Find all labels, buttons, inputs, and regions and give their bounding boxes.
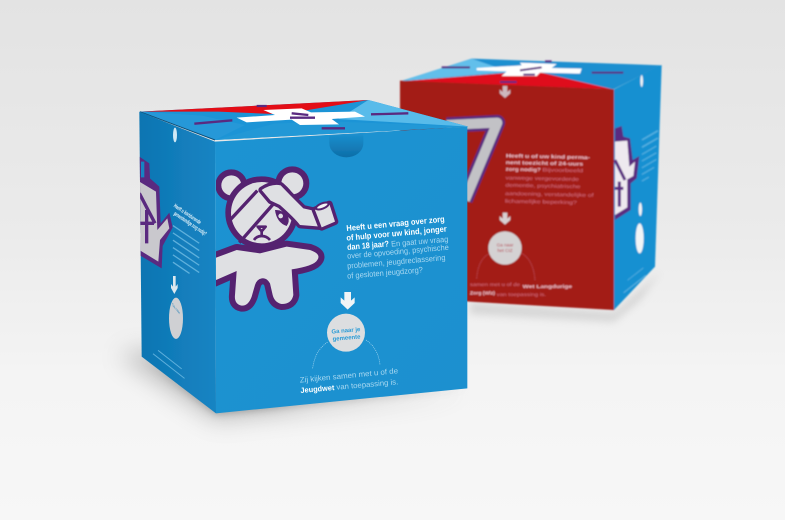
back box [400,59,662,310]
left face arrow [171,276,178,294]
front face text block: Heeft u een vraag over zorg [346,214,445,233]
first aid kit on red face [447,123,497,200]
back box: right face [614,65,662,310]
red face text: Bijvoorbeeld [542,167,583,174]
right face text [623,130,658,293]
red face footer text: van toepassing is. [497,292,546,298]
red face text: aandoening, verstandelijke of [505,191,594,199]
bandage tail [262,185,321,227]
first aid kit on left face [139,157,173,268]
floor shadows [118,272,660,420]
front face text block: problemen, jeugdreclassering [347,253,446,271]
circle: Ga naar je gemeente: Ga naar je [331,327,361,336]
front face text block: of hulp voor uw kind, jonger [346,224,448,243]
right face arrow and circle [636,75,644,253]
red face footer text [470,282,572,298]
red face text: zorg nodig? [506,167,541,173]
red face text: vanwege vergevorderde [505,175,579,183]
left face content [139,128,208,379]
red face footer text: samen met u of de [470,282,520,288]
bear body [210,247,319,306]
bandage stripes [231,191,273,243]
bandage roll [315,201,335,227]
front face text block: over de opvoeding, psychische [347,243,450,261]
front face text block: dan 18 jaar? [347,238,389,252]
left face circle [169,298,183,339]
front box: faces [139,112,467,413]
red face text: nent toezicht of 24-uurs [506,160,584,168]
front box [139,100,468,413]
bear ears [221,172,303,195]
red face text: dementie, psychiatrische [505,183,581,190]
circle: Ga naar het CIZ: Ga naar [497,243,514,248]
arrow down [341,292,355,310]
back box: red face [400,65,662,310]
red face text: Heeft u of uw kind perma- [506,153,590,161]
footer text: Jeugdwet [300,383,335,395]
eye [278,214,283,218]
arrow top [500,86,510,98]
circle: Ga naar het CIZ [488,231,522,265]
circle: Ga naar je gemeente: gemeente [332,334,361,343]
front face text block: of gesloten jeugdzorg? [347,265,424,281]
bear with bandages [210,172,335,306]
left face heading text [173,204,207,236]
left face [139,112,216,413]
front face [215,127,467,413]
dotted arcs [313,340,380,368]
left face heading text: Heeft u kortdurende [172,203,202,226]
dotted arcs [477,253,535,280]
red face footer text: Wet Langdurige [523,284,572,290]
left face drop mark [173,128,177,142]
front face text block [346,214,450,281]
left face description lines [153,225,200,379]
bear head [231,182,292,243]
circle: Ga naar je gemeente [327,314,365,352]
footer text: van toepassing is. [336,377,399,392]
nose and mouth [254,227,270,240]
lid notch [329,134,363,157]
left face heading text: geneeskundige zorg nodig? [172,211,208,238]
red face text: lichamelijke beperking? [505,199,577,206]
first aid kit on right face [615,126,639,220]
back box: top flap [400,59,662,89]
eye patch [275,210,289,226]
footer text: Zij kijken samen met u of de [299,366,398,385]
front box: top flap [140,100,468,140]
arrow middle [500,213,510,225]
red face text [505,153,595,207]
left face circle: Ga naar [172,301,180,316]
circle: Ga naar het CIZ: het CIZ [497,248,513,253]
red face footer text: Zorg (Wlz) [470,290,495,296]
footer text [299,366,399,395]
front face text block: En gaat uw vraag [391,235,449,249]
